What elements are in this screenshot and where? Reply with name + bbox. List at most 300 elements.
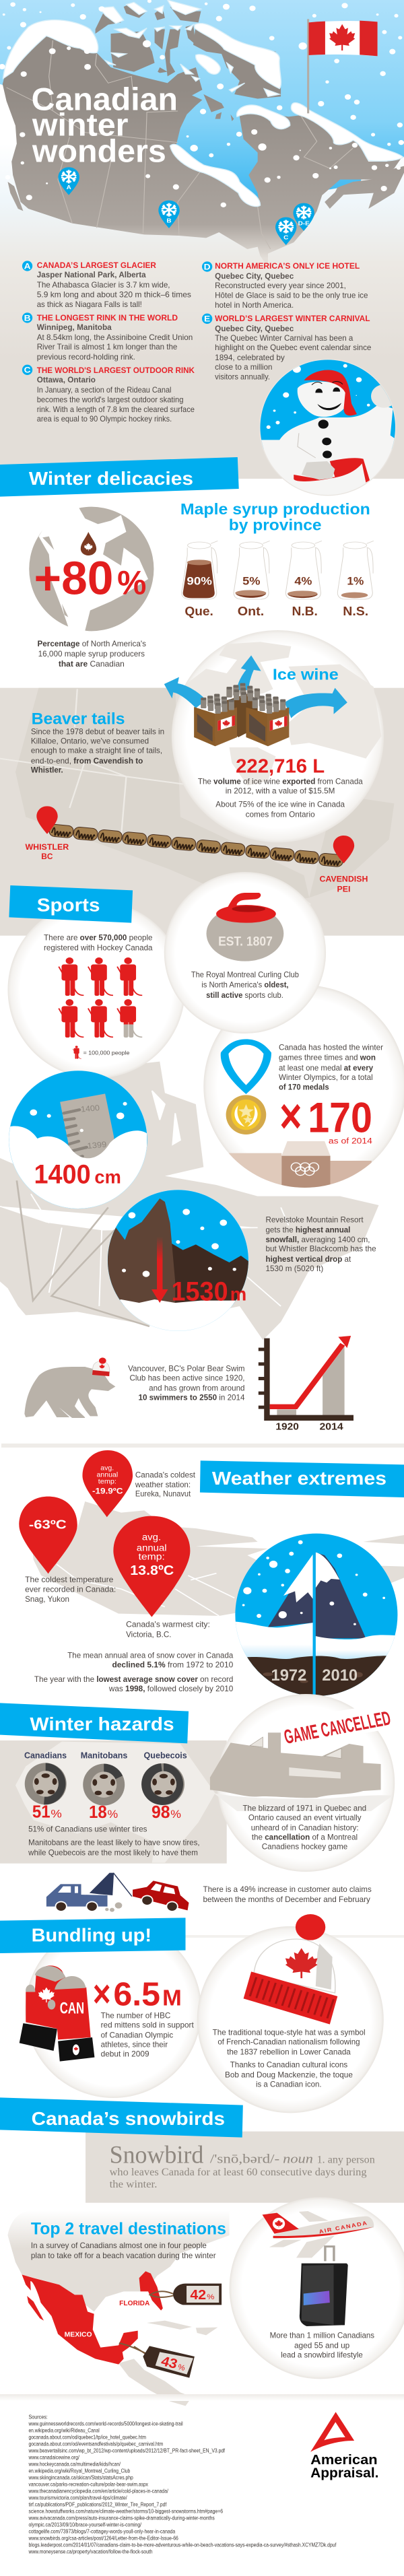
legend E: The Quebec Winter Carnival has been a xyxy=(215,333,354,343)
source list: www.guinnessworldrecords.com/world-records/5000/longest-ice-skating-trail xyxy=(28,2420,183,2427)
snowfall circle xyxy=(7,1069,149,1212)
icon: red mittens xyxy=(20,1965,94,2062)
Olympic podium xyxy=(227,1141,372,1192)
luggage tag: Mexico 43% xyxy=(119,2343,195,2378)
icon: snowed-in arena xyxy=(210,1732,393,1811)
pin: Whistler BC xyxy=(25,806,69,861)
text: winter tires: Manitobans are the least likely to have snow tires, xyxy=(28,1838,200,1847)
toque circle xyxy=(197,1914,384,2113)
pin: Eureka: -19.9ºC xyxy=(92,1487,123,1495)
text: toque history: Bob and Doug Mackenzie, the toque xyxy=(225,2070,353,2079)
legend A xyxy=(22,261,191,309)
jug: New Brunswick 4%: 4% xyxy=(294,574,312,587)
circle: snow cover 1972 versus 2010: 1972 xyxy=(271,1667,306,1685)
source list: tirf.ca/publications/PDF_publications/2012_Winter_Tire_Report_7.pdf xyxy=(28,2501,166,2508)
pin: Cavendish PEI xyxy=(319,836,368,893)
text: HBC red mittens: red mittens sold in support xyxy=(101,2021,194,2029)
heading and text: Beaver tails: Killaloe, Ontario, we've consumed xyxy=(31,737,149,745)
maple syrup globe and jugs xyxy=(29,501,374,669)
snowfall circle: 1400 xyxy=(80,1103,100,1114)
hockey circle: registered with Hockey Canada xyxy=(44,943,153,952)
ice wine stat and text: comes from Ontario xyxy=(246,809,315,819)
legend B: Winnipeg, Manitoba xyxy=(37,323,112,332)
panel: beaver tails beige background xyxy=(0,688,404,936)
section banner: Sports: Sports xyxy=(37,895,100,916)
legend E: WORLD’S LARGEST WINTER CARNIVAL xyxy=(215,314,370,323)
tire: Canadians 51% xyxy=(24,1751,67,1821)
section banner: Winter delicacies xyxy=(0,457,239,497)
legend A: as thick as Niagara Falls is tall! xyxy=(37,300,142,309)
heading and text: top 2 travel destinations: Top 2 travel destinations xyxy=(31,2218,226,2238)
heading: maple syrup production by province: by province xyxy=(229,516,322,534)
legend E xyxy=(202,314,371,381)
logo: American Appraisal: Appraisal. xyxy=(310,2465,378,2480)
panel: snowbird definition: Snowbird xyxy=(110,2140,203,2169)
pin: Cavendish PEI: CAVENDISH xyxy=(319,874,368,883)
panel: snowbird definition: 1. any person xyxy=(317,2153,375,2165)
source list: science.howstuffworks.com/nature/climate-weather/storms/10-biggest-snowstorms.htm#page=6 xyxy=(28,2508,223,2515)
globe caption: 16,000 maple syrup producers xyxy=(38,649,145,658)
text: blizzard of 1971: Ontario caused an event virtually xyxy=(248,1813,362,1822)
ice wine crates xyxy=(194,683,289,746)
legend A: The Athabasca Glacier is 3.7 km wide, xyxy=(37,280,170,290)
legend A: 5.9 km long and about 320 m thick–6 times xyxy=(37,290,191,299)
ice wine stat and text: in 2012, with a value of $15.5M xyxy=(226,786,335,795)
source list: www.thecanadianencyclopedia.com/en/article/cold-places-in-canada/ xyxy=(28,2488,168,2495)
legend E: close to a million xyxy=(215,362,272,372)
text: Revelstoke and Whistler: but Whistler Blackcomb has the xyxy=(266,1244,376,1253)
text: HBC red mittens: The number of HBC xyxy=(101,2011,171,2020)
heading: maple syrup production by province: Maple syrup production xyxy=(180,501,370,518)
section banner: Winter hazards xyxy=(0,1703,189,1743)
text: snow cover decline: The mean annual area of snow cover in Canada xyxy=(67,1651,234,1660)
heading and text: Beaver tails: end-to-end, from Cavendish to xyxy=(31,756,143,766)
source list: gocanada.about.com/od/eventsandfestivals/p/quebec_carnival.htm xyxy=(28,2441,163,2447)
text: blizzard of 1971: Canadiens hockey game xyxy=(262,1842,347,1851)
text: auto claims: There is a 49% increase in customer auto claims xyxy=(203,1885,372,1894)
legend E: Quebec City, Quebec xyxy=(215,324,294,333)
pin: Whistler BC: BC xyxy=(41,852,53,861)
snowfall circle: 1399 xyxy=(87,1139,107,1151)
source list: www.snowbirds.org/csa-articles/post/1264/Letter-from-the-Editor-Issue-66 xyxy=(28,2535,178,2542)
circle: million Canadian snowbirds: aged 55 and up xyxy=(294,2341,349,2350)
panel: snowbird definition: the winter. xyxy=(110,2178,157,2190)
game cancelled circle xyxy=(217,1694,395,1872)
text: Revelstoke and Whistler xyxy=(266,1215,376,1273)
text: coldest temperature: ever recorded in Canada: xyxy=(25,1585,116,1594)
snow caps xyxy=(3,0,403,207)
source list: vancouver.ca/parks-recreation-culture/polar-bear-swim.aspx xyxy=(28,2481,148,2488)
source list: www.beavertailsinc.com/wp_bt_2012/wp-content/uploads/2012/12/BT_PR-fact-sheet_EN_V3.pdf xyxy=(28,2447,225,2454)
legend C: becomes the world's largest outdoor skating xyxy=(37,395,183,404)
panel: weather extremes xyxy=(19,1450,404,1697)
section banner: Winter hazards: Winter hazards xyxy=(30,1714,174,1734)
legend C: area is equal to 90 Olympic hockey rinks. xyxy=(37,414,172,423)
jug: Ontario 5% xyxy=(234,541,270,619)
heading and text: Beaver tails xyxy=(31,710,164,774)
text: winter tires xyxy=(28,1824,200,1857)
text: coldest weather station: Eureka, Nunavut xyxy=(135,1489,191,1498)
text: polar bear swim club: Vancouver, BC's Polar Bear Swim xyxy=(128,1364,245,1373)
polar bear swim section xyxy=(1,1336,404,1448)
province borders xyxy=(7,40,353,249)
ice wine stat and text: The volume of ice wine exported from Canada xyxy=(198,777,363,786)
text: coldest weather station: weather station: xyxy=(135,1480,191,1489)
pin: Victoria xyxy=(113,1516,190,1617)
tire: Manitobans 18%: 18 xyxy=(89,1802,107,1822)
section banner: Weather extremes: Weather extremes xyxy=(212,1468,386,1489)
Bonhomme mascot circle xyxy=(258,359,397,498)
callout lines xyxy=(17,1180,149,1326)
text: Revelstoke and Whistler: gets the highest annual xyxy=(266,1225,350,1234)
tire: Canadians 51%: 51 xyxy=(32,1802,50,1821)
legend B xyxy=(22,312,193,362)
text: blizzard of 1971 xyxy=(242,1803,366,1851)
location pin C xyxy=(275,217,296,245)
text: polar bear swim club: 10 swimmers to 2550 in 2014 xyxy=(138,1393,245,1402)
mountain vertical drop circle xyxy=(106,1190,250,1333)
text: toque history: Thanks to Canadian cultural icons xyxy=(230,2060,348,2069)
Olympic medals circle: Canada has hosted the winter xyxy=(279,1042,384,1052)
location pin C: C xyxy=(283,234,289,240)
text: Revelstoke and Whistler: highest vertical drop at xyxy=(266,1254,351,1264)
text: warmest city: Canada's warmest city: xyxy=(126,1620,210,1629)
sources and logo xyxy=(0,2394,404,2555)
tire: Canadians 51%: % xyxy=(50,1807,62,1820)
jug: Ontario 5%: Ont. xyxy=(238,605,264,619)
section banner: Sports xyxy=(9,885,133,923)
legend B: River Trail is almost 1 km longer than the xyxy=(37,342,177,351)
panel: snowbird definition: who leaves Canada for at least 60 consecutive days during xyxy=(110,2166,367,2178)
tire: Quebecois 98%: % xyxy=(170,1808,181,1821)
text: warmest city xyxy=(126,1620,210,1639)
map legend entries xyxy=(22,261,397,498)
source list: gocanada.about.com/od/quebec1/tp/ice_hotel_quebec.htm xyxy=(28,2434,146,2441)
curling circle: The Royal Montreal Curling Club xyxy=(191,970,299,979)
legend D: Reconstructed every year since 2001, xyxy=(215,281,346,290)
tire: Manitobans 18%: % xyxy=(108,1808,118,1821)
text: toque history: of French-Canadian nationalism following xyxy=(217,2037,360,2046)
text: coldest weather station xyxy=(135,1470,195,1498)
legend E: E xyxy=(204,314,211,323)
mountain vertical drop circle: m xyxy=(230,1285,246,1305)
text: auto claims: between the months of December and February xyxy=(203,1895,370,1904)
circle: million Canadian snowbirds: More than 1 million Canadians xyxy=(270,2330,374,2340)
map of North America xyxy=(7,2210,230,2406)
text: snow cover decline: The year with the lowest average snow cover on record xyxy=(34,1674,233,1684)
pin: Whistler BC: WHISTLER xyxy=(25,842,69,852)
text: Revelstoke and Whistler: snowfall, averaging 1400 cm, xyxy=(266,1235,370,1244)
header background xyxy=(0,0,404,479)
legend B: THE LONGEST RINK IN THE WORLD xyxy=(37,313,178,323)
ice wine stat and text: 222,716 L xyxy=(236,755,325,777)
jug: Nova Scotia 1% xyxy=(337,541,374,619)
panel: snowbird definition xyxy=(86,2132,404,2203)
source list: www.hockeycanada.ca/multimedia/kids/hcan/ xyxy=(28,2461,121,2468)
heading and text: Beaver tails: Whistler. xyxy=(31,766,63,774)
panel: sports map and circles xyxy=(0,872,404,1340)
hockey circle xyxy=(7,901,185,1079)
luggage tag: Florida 42%: 42 xyxy=(190,2287,206,2303)
panel: top 2 travel destinations xyxy=(7,2197,404,2406)
globe with 80 percent stat xyxy=(29,507,154,632)
medal count stat: 170 xyxy=(308,1094,372,1142)
pin: Victoria: annual xyxy=(137,1543,167,1553)
heading and text: Beaver tails: Since the 1978 debut of beaver tails in xyxy=(31,727,164,736)
snowfall circle: 1400 xyxy=(34,1159,91,1190)
source list: en.wikipedia.org/wiki/Royal_Montreal_Curling_Club xyxy=(28,2468,130,2474)
text: polar bear swim club: and has grown from around xyxy=(149,1384,245,1392)
pin: Snag xyxy=(19,1497,77,1573)
legend C: rink. With a length of 7.8 km the cleared surface xyxy=(37,405,195,414)
icon: polar bear with toque xyxy=(24,1357,115,1418)
location pin D-E xyxy=(293,203,314,231)
jug: Quebec 90% xyxy=(182,541,217,619)
map of North America: FLORIDA xyxy=(119,2300,150,2307)
stat: 6.5M mittens sold: 6.5 xyxy=(113,1976,160,2012)
title: wonders xyxy=(32,133,166,169)
Canadian landmass xyxy=(3,2,404,267)
title: winter xyxy=(32,107,129,143)
source list: www.avivacanada.com/press/auto-insurance-claims-spike-dramatically-during-winter-months xyxy=(28,2515,215,2521)
pin: Eureka xyxy=(82,1450,133,1517)
chart: swim club membership 1920 to 2014: 1920 xyxy=(275,1422,299,1432)
legend D: Hôtel de Glace is said to be the only true ice xyxy=(215,290,368,300)
source list: olympic.ca/2013/09/10/brace-yourself-winter-is-coming/ xyxy=(28,2521,141,2528)
location pin A: A xyxy=(67,184,71,191)
text: toque history: The traditional toque-style hat was a symbol xyxy=(213,2028,366,2037)
legend D: D xyxy=(204,262,211,271)
text: Revelstoke and Whistler: Revelstoke Mountain Resort xyxy=(266,1215,364,1224)
luggage tag: Florida 42%: % xyxy=(207,2293,215,2301)
jug: Nova Scotia 1%: N.S. xyxy=(343,605,368,619)
pin: Victoria: 13.8ºC xyxy=(130,1562,174,1578)
heading and text: top 2 travel destinations xyxy=(31,2218,226,2260)
icon: red mittens: CAN xyxy=(60,2000,84,2017)
heading: maple syrup production by province xyxy=(180,501,370,534)
ice wine globe xyxy=(172,630,384,842)
panel: snowbird definition: /'snō,bərd/- xyxy=(210,2153,279,2166)
section banner: Canada's snowbirds: Canada’s snowbirds xyxy=(32,2109,225,2129)
Olympic medals circle: at least one medal at every xyxy=(279,1063,374,1073)
jug: Quebec 90%: Que. xyxy=(184,605,213,619)
tire: Manitobans 18%: Manitobans xyxy=(81,1751,127,1761)
curling circle xyxy=(164,872,326,1033)
legend D: hotel in North America. xyxy=(215,300,294,310)
text: polar bear swim club: Club has been active since 1920, xyxy=(129,1374,245,1382)
luggage tag: Mexico 43%: % xyxy=(176,2363,187,2373)
icon: tow truck and car xyxy=(46,1873,189,1912)
text: coldest temperature: The coldest temperature xyxy=(25,1575,113,1584)
text: toque history: the 1837 rebellion in Lower Canada xyxy=(227,2047,351,2056)
text: toque history xyxy=(213,2028,366,2089)
pin: Cavendish PEI: PEI xyxy=(337,885,350,893)
jug: New Brunswick 4%: N.B. xyxy=(292,605,318,619)
heading and text: Beaver tails: enough to make a straight line of tails, xyxy=(31,746,162,755)
hockey circle: There are over 570,000 people xyxy=(44,933,153,942)
legend B: At 8.54km long, the Assiniboine Credit Union xyxy=(37,333,193,342)
tire: Quebecois 98%: 98 xyxy=(152,1802,170,1822)
text: polar bear swim club xyxy=(128,1364,245,1402)
section banner: Bundling up: Bundling up! xyxy=(32,1925,152,1946)
text: blizzard of 1971: unheard of in Canadian history: xyxy=(251,1823,359,1832)
source list: www.moneysense.ca/property/vacation/follow-the-flock-south xyxy=(28,2548,153,2555)
circle: million Canadian snowbirds: lead a snowbird lifestyle xyxy=(281,2350,363,2359)
globe caption: Percentage of North America's xyxy=(37,639,146,648)
ice wine stat and text: About 75% of the ice wine in Canada xyxy=(215,799,345,809)
pin: Victoria: temp: xyxy=(138,1552,165,1562)
pin: Snag: -63ºC xyxy=(29,1518,67,1532)
jug: Ontario 5%: 5% xyxy=(242,574,261,587)
stat: 6.5M mittens sold xyxy=(93,1972,182,2014)
export arrows xyxy=(164,655,347,718)
title: Canadian xyxy=(32,81,178,117)
falling snow xyxy=(0,0,404,207)
heading and text: top 2 travel destinations: In a survey of Canadians almost one in four people xyxy=(31,2241,207,2250)
text: HBC red mittens: of Canadian Olympic xyxy=(101,2031,173,2039)
tire: Quebecois 98%: Quebecois xyxy=(144,1751,187,1761)
curling circle: EST. 1807 xyxy=(218,935,273,949)
legend B: previous record-holding rink. xyxy=(37,352,135,362)
map of North America: MEXICO xyxy=(65,2331,92,2338)
chart: swim club membership 1920 to 2014: 2014 xyxy=(319,1422,343,1432)
panel: snowbird definition: noun xyxy=(283,2153,313,2166)
location pin B xyxy=(158,201,180,228)
gold medal xyxy=(226,1095,266,1134)
logo: American Appraisal xyxy=(310,2412,378,2480)
stat: 6.5M mittens sold: × xyxy=(93,1972,111,2014)
mountain vertical drop circle: 1530 xyxy=(171,1277,228,1307)
legend A: A xyxy=(24,261,31,271)
pin: Eureka: annual xyxy=(96,1471,118,1479)
globe with 80 percent stat: +80 xyxy=(34,551,113,605)
legend C: In January, a section of the Rideau Canal xyxy=(37,385,172,395)
globe with 80 percent stat: % xyxy=(117,564,146,602)
Olympic medals circle: games three times and won xyxy=(279,1053,376,1062)
legend E: 1894, celebrated by xyxy=(215,353,285,362)
source list xyxy=(28,2414,337,2555)
circle: snow cover 1972 versus 2010 xyxy=(233,1533,399,1697)
text: winter tires: 51% of Canadians use winter tires xyxy=(28,1824,147,1833)
medal count stat: as of 2014 xyxy=(329,1137,372,1145)
chain of beaver tails xyxy=(48,824,343,867)
ice wine stat and text xyxy=(198,755,363,819)
Canadian flag xyxy=(307,19,378,113)
legend D: NORTH AMERICA’S ONLY ICE HOTEL xyxy=(215,261,360,271)
hockey circle: = 100,000 people xyxy=(83,1050,129,1056)
map of Canada with snow and flag xyxy=(0,0,404,267)
text: snow cover decline xyxy=(34,1651,234,1693)
source list: www.canadaicewine.org/ xyxy=(28,2454,79,2461)
source list: cottagelife.com/73973/blogs/7-cottagey-words-youll-only-hear-in-canada xyxy=(28,2528,176,2535)
jug: New Brunswick 4% xyxy=(285,541,322,619)
text: HBC red mittens xyxy=(101,2011,194,2058)
panel: winter hazards xyxy=(0,1694,404,1938)
text: Revelstoke and Whistler: 1530 m (5020 ft) xyxy=(266,1264,323,1273)
text: warmest city: Victoria, B.C. xyxy=(126,1630,171,1639)
curling circle: still active sports club. xyxy=(206,990,283,1000)
legend C xyxy=(22,365,195,423)
chart: swim club membership 1920 to 2014 xyxy=(259,1336,354,1432)
pin: Eureka: temp: xyxy=(98,1478,116,1485)
text: HBC red mittens: debut in 2009 xyxy=(101,2049,149,2058)
globe caption: that are Canadian xyxy=(59,659,125,669)
legend C: Ottawa, Ontario xyxy=(37,375,96,384)
stat: 6.5M mittens sold: M xyxy=(162,1986,182,2010)
pin: Victoria: avg. xyxy=(142,1532,161,1543)
panel: bundling up xyxy=(25,1914,384,2113)
Olympic medals circle: Winter Olympics, for a total xyxy=(279,1073,373,1082)
sign: GAME CANCELLED xyxy=(281,1702,394,1748)
legend B: B xyxy=(24,313,31,323)
pin: Eureka: avg. xyxy=(100,1464,114,1472)
circle: million Canadian snowbirds xyxy=(230,2197,404,2379)
section banner: Canada's snowbirds xyxy=(0,2097,243,2138)
pale map of Canada xyxy=(0,1062,378,1340)
curling circle: is North America's oldest, xyxy=(201,980,289,989)
source list: Sources: xyxy=(28,2414,48,2420)
luggage tag: Florida 42% xyxy=(150,2284,222,2305)
tire: Manitobans 18% xyxy=(81,1751,127,1822)
jug: Nova Scotia 1%: 1% xyxy=(347,574,364,587)
section banner: Bundling up xyxy=(0,1918,186,1953)
source list: www.skiingincanada.ca/skican/Stats/statsAcres.php xyxy=(28,2474,133,2481)
Olympic medals circle xyxy=(203,985,404,1188)
text: auto claims xyxy=(203,1885,372,1904)
medal count stat: × xyxy=(279,1089,302,1143)
text: HBC red mittens: athletes, since their xyxy=(101,2040,168,2049)
text: snow cover decline: was 1998, followed closely by 2010 xyxy=(108,1684,233,1693)
snowfall circle: cm xyxy=(94,1167,121,1188)
jug: Quebec 90%: 90% xyxy=(187,574,212,587)
text: coldest temperature: Snag, Yukon xyxy=(25,1594,69,1604)
text: snow cover decline: declined 5.1% from 1972 to 2010 xyxy=(112,1660,233,1669)
title xyxy=(32,81,178,169)
tire: Quebecois 98% xyxy=(141,1751,187,1822)
location pin B: B xyxy=(166,217,172,224)
pale map xyxy=(31,1501,404,1616)
legend D xyxy=(202,261,368,310)
legend C: C xyxy=(24,366,31,374)
location pin D-E: D-E xyxy=(298,220,310,226)
circle: million Canadian snowbirds: AIR CANADA xyxy=(318,2220,369,2235)
circle: snow cover 1972 versus 2010: 2010 xyxy=(322,1667,358,1685)
section banner: Weather extremes xyxy=(200,1460,404,1497)
legend D: Quebec City, Quebec xyxy=(215,271,294,281)
legend C: THE WORLD'S LARGEST OUTDOOR RINK xyxy=(37,366,195,375)
legend A: CANADA’S LARGEST GLACIER xyxy=(37,261,156,270)
text: coldest temperature xyxy=(25,1575,116,1604)
text: winter tires: while Quebecois are the most likely to have them xyxy=(28,1848,198,1857)
panel: beaver tails and ice wine xyxy=(25,630,384,893)
section banner: Winter delicacies: Winter delicacies xyxy=(29,469,193,489)
globe caption xyxy=(37,639,146,669)
luggage tag: Mexico 43%: 43 xyxy=(160,2354,179,2372)
text: coldest weather station: Canada's coldest xyxy=(135,1470,195,1479)
text: blizzard of 1971: The blizzard of 1971 in Quebec and xyxy=(242,1803,366,1812)
heading: Ice wine: Ice wine xyxy=(273,666,339,683)
mittens circle xyxy=(25,1922,201,2098)
location pin A xyxy=(58,167,79,195)
Olympic medals circle: of 170 medals xyxy=(279,1083,329,1091)
heading and text: Beaver tails: Beaver tails xyxy=(32,710,125,728)
legend E: visitors annually. xyxy=(215,372,270,381)
text: blizzard of 1971: the cancellation of a Montreal xyxy=(252,1833,358,1841)
source list: www.tourismvictoria.com/plan/travel-tips/climate/ xyxy=(28,2495,127,2501)
text: toque history: is a Canadian icon. xyxy=(256,2079,322,2089)
medal count stat xyxy=(279,1089,372,1145)
tire: Canadians 51%: Canadians xyxy=(24,1751,67,1761)
